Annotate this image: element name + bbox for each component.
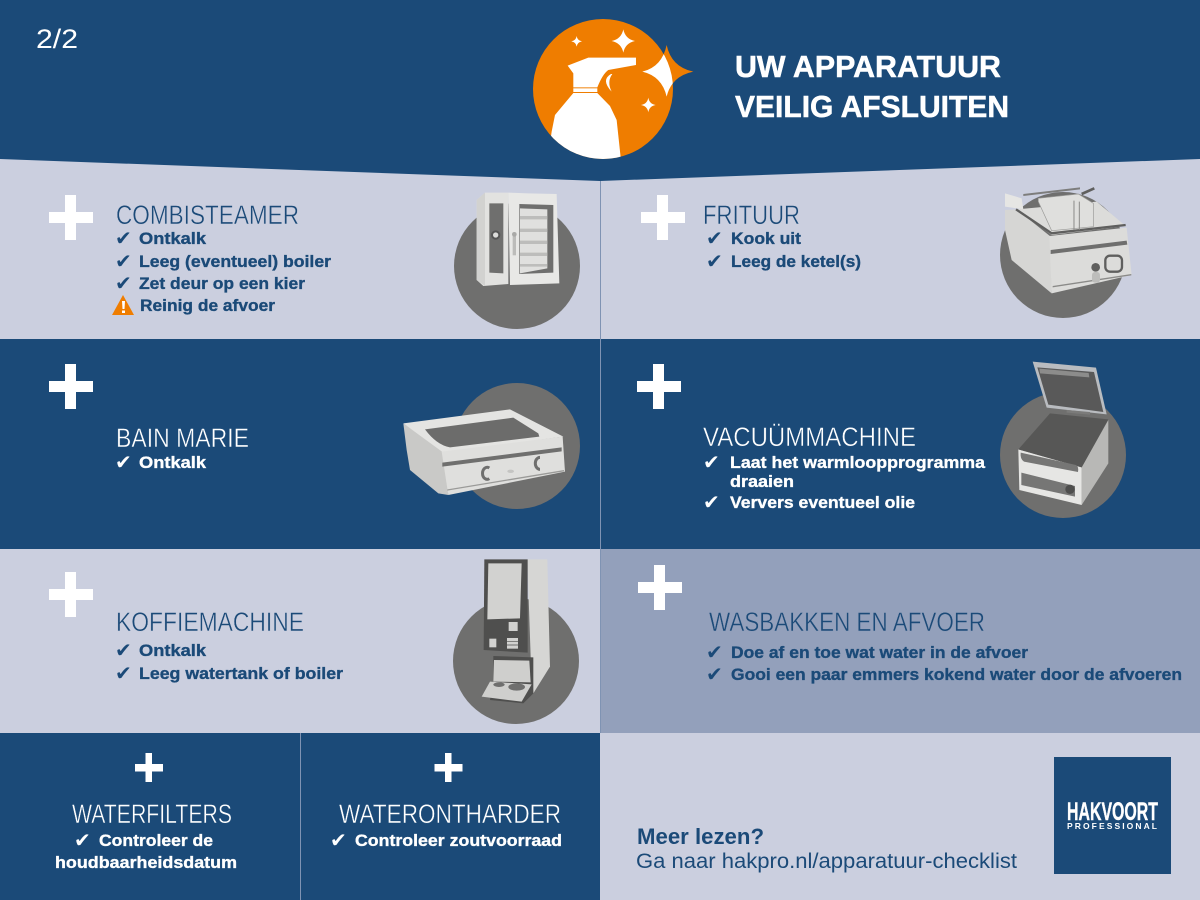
- page number: 2/2: [36, 24, 78, 54]
- checklist: combisteamer: Reinig de afvoer: [140, 296, 275, 315]
- checklist: wasbakken en afvoer: ✔: [706, 662, 723, 686]
- heading: vacuummachine: VACUÜMMACHINE: [703, 422, 916, 452]
- checklist: combisteamer: Ontkalk: [139, 229, 207, 248]
- checklist: waterfilters: houdbaarheidsdatum: [55, 853, 237, 872]
- checklist: vacuummachine: draaien: [730, 472, 794, 491]
- checklist: koffiemachine: Ontkalk: [139, 641, 207, 660]
- checklist: frituur: Leeg de ketel(s): [731, 252, 861, 271]
- icon: vacuum machine: [1000, 362, 1126, 518]
- icon: plus: [637, 364, 681, 409]
- checklist: bain marie: ✔: [115, 450, 132, 474]
- icon: plus: [49, 195, 93, 240]
- checklist: waterontharder: Controleer zoutvoorraad: [355, 831, 562, 850]
- checklist: waterfilters: ✔: [74, 828, 91, 852]
- checklist: combisteamer: ✔: [115, 226, 132, 250]
- heading: waterontharder: WATERONTHARDER: [339, 799, 561, 829]
- icon: griddle: [403, 383, 580, 509]
- checklist: combisteamer: ✔: [115, 249, 132, 273]
- checklist: frituur: ✔: [706, 226, 723, 250]
- icon: spray bottle: [533, 19, 693, 167]
- checklist: koffiemachine: Leeg watertank of boiler: [139, 664, 343, 683]
- checklist: bain marie: Ontkalk: [139, 453, 207, 472]
- checklist: combisteamer: ✔: [115, 271, 132, 295]
- panel: bain marie: [0, 339, 600, 549]
- checklist: bain marie: [115, 450, 207, 474]
- icon: plus: [49, 364, 93, 409]
- logo: hakvoort professional: [1054, 757, 1171, 874]
- title: UW APPARATUUR: [735, 49, 1001, 84]
- checklist: combisteamer: Leeg (eventueel) boiler: [139, 252, 331, 271]
- panel: combisteamer: [0, 159, 600, 339]
- header banner: [0, 0, 1200, 181]
- icon: plus: [135, 753, 163, 782]
- checklist: waterontharder: ✔: [330, 828, 347, 852]
- checklist: frituur: Kook uit: [731, 229, 801, 248]
- checklist: wasbakken en afvoer: ✔: [706, 640, 723, 664]
- text: link: Ga naar hakpro.nl/apparatuur-checklist: [636, 850, 1017, 873]
- panel: frituur: [600, 159, 1200, 339]
- icon: fryer: [1000, 187, 1132, 318]
- heading: combisteamer: COMBISTEAMER: [116, 200, 299, 230]
- checklist: waterontharder: [330, 828, 562, 852]
- icon: coffee machine: [453, 559, 579, 724]
- checklist: waterfilters: Controleer de: [99, 831, 213, 850]
- checklist: vacuummachine: ✔: [703, 490, 720, 514]
- checklist: combisteamer: Zet deur op een kier: [139, 274, 305, 293]
- checklist: waterfilters: [55, 828, 237, 872]
- checklist: koffiemachine: ✔: [115, 638, 132, 662]
- icon: combisteamer oven: [454, 193, 580, 329]
- heading: waterfilters: WATERFILTERS: [72, 799, 232, 829]
- checklist: vacuummachine: Laat het warmloopprogramma: [730, 453, 986, 472]
- checklist: koffiemachine: ✔: [115, 661, 132, 685]
- title: [735, 49, 1009, 124]
- checklist: vacuummachine: [703, 450, 986, 514]
- checklist: wasbakken en afvoer: Gooi een paar emmers kokend water door de afvoeren: [731, 665, 1182, 684]
- checklist: vacuummachine: Ververs eventueel olie: [730, 493, 915, 512]
- heading: wasbakken en afvoer: WASBAKKEN EN AFVOER: [709, 607, 985, 637]
- title: VEILIG AFSLUITEN: [735, 89, 1009, 124]
- checklist: wasbakken en afvoer: Doe af en toe wat water in de afvoer: [731, 643, 1028, 662]
- logo: hakvoort professional: PROFESSIONAL: [1067, 821, 1157, 831]
- heading: bain marie: BAIN MARIE: [116, 423, 249, 453]
- checklist: vacuummachine: ✔: [703, 450, 720, 474]
- panel: waterontharder: [300, 733, 600, 900]
- panel: waterfilters: [0, 733, 300, 900]
- heading: koffiemachine: KOFFIEMACHINE: [116, 607, 304, 637]
- checklist: wasbakken en afvoer: [706, 640, 1182, 686]
- panel: meer lezen: [600, 733, 1200, 900]
- panel: koffiemachine: [0, 549, 600, 733]
- icon: plus: [641, 195, 685, 240]
- panel: vacuummachine: [600, 339, 1200, 549]
- checklist: frituur: ✔: [706, 249, 723, 273]
- checklist: koffiemachine: [115, 638, 343, 685]
- heading: frituur: FRITUUR: [703, 200, 800, 230]
- icon: warning triangle: [112, 295, 134, 315]
- checklist: frituur: [706, 226, 861, 273]
- icon: plus: [434, 753, 462, 782]
- icon: plus: [638, 565, 682, 610]
- panel: wasbakken en afvoer: [600, 549, 1200, 733]
- checklist: combisteamer: [115, 226, 331, 315]
- text: meer lezen: Meer lezen?: [637, 824, 764, 849]
- icon: plus: [49, 572, 93, 617]
